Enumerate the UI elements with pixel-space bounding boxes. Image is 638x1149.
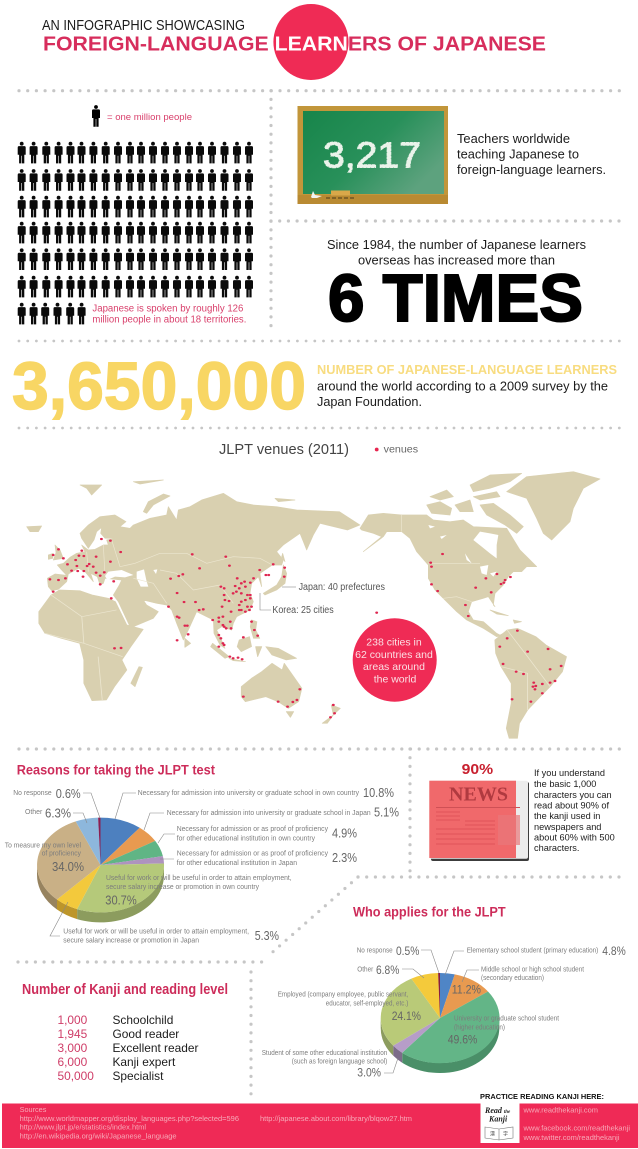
90% figure: 90% xyxy=(462,761,493,778)
kanji counts xyxy=(58,1013,94,1083)
teachers text: foreign-language learners. xyxy=(457,163,606,177)
pie labels: University or graduate school student xyxy=(454,1016,559,1023)
links: www.readthekanji.com xyxy=(522,1106,598,1115)
growth text: overseas has increased more than xyxy=(358,253,555,268)
newspaper text: If you understand xyxy=(534,768,605,778)
footer xyxy=(2,1092,638,1148)
main heading: FOREIGN-LANGUAGE LEARNERS OF JAPANESE xyxy=(43,32,546,55)
newspaper text: about 60% with 500 xyxy=(534,832,615,842)
pie labels: Employed (company employee, public servant, xyxy=(278,992,408,999)
big number: 3,650,000: 3,650,000 xyxy=(12,349,306,424)
reading levels: Excellent reader xyxy=(112,1041,198,1055)
reading levels: Good reader xyxy=(112,1027,179,1041)
pie labels xyxy=(262,944,626,1080)
pie labels: secure salary increase or promotion in own country xyxy=(106,884,259,891)
big number: 6 times: 6 TIMES xyxy=(328,261,583,336)
callout: 238 cities: 238 cities in xyxy=(366,637,422,649)
logo: Read the Kanji: Read the xyxy=(484,1106,511,1115)
pie labels: Necessary for admission or as proof of proficiency xyxy=(177,826,328,833)
panel: speakers pictogram xyxy=(18,105,253,326)
pie labels: Necessary for admission or as proof of proficiency xyxy=(177,851,328,858)
pie labels: 49.6% xyxy=(448,1032,478,1046)
sources: Sources xyxy=(20,1105,47,1114)
panel: teachers chalkboard xyxy=(298,106,606,204)
pie labels: Useful for work or will be useful in order to attain employment, xyxy=(106,875,292,882)
title badge circle xyxy=(273,4,349,80)
map legend: venues xyxy=(384,444,418,456)
chalk number: 3,217 xyxy=(323,134,421,176)
pie chart: reasons xyxy=(37,818,164,922)
logo: Read the Kanji xyxy=(480,1103,520,1143)
sources: http://www.worldmapper.org/display_languages.php?selected=596 xyxy=(20,1114,239,1123)
pie labels: 4.8% xyxy=(602,944,626,958)
callout: Japan: Japan: 40 prefectures xyxy=(299,582,385,593)
newspaper text: the basic 1,000 xyxy=(534,779,596,789)
pie labels: No response xyxy=(13,790,52,797)
links: www.twitter.com/readthekanji xyxy=(522,1133,620,1142)
panel: reasons for taking the JLPT xyxy=(5,762,399,945)
sources: http://japanese.about.com/library/blqow27.htm xyxy=(260,1114,412,1123)
newspaper text: the kanji used in xyxy=(534,811,600,821)
pie labels: Other xyxy=(357,967,374,974)
practice heading: PRACTICE READING KANJI HERE: xyxy=(480,1092,604,1101)
pie labels: (higher education) xyxy=(454,1024,505,1031)
newspaper text: newspapers and xyxy=(534,822,601,832)
reading levels xyxy=(112,1013,198,1083)
speakers caption: Japanese is spoken by roughly 126 xyxy=(92,304,244,315)
pie labels: 24.1% xyxy=(392,1009,421,1023)
callout: Korea: Korea: 25 cities xyxy=(272,605,334,616)
teachers text: teaching Japanese to xyxy=(457,148,579,162)
pie labels: Other xyxy=(25,809,43,816)
kanji counts: 50,000 xyxy=(58,1069,94,1083)
pie labels: 0.5% xyxy=(396,944,420,958)
panel: who applies for the JLPT xyxy=(262,905,626,1080)
heading: Who applies for the JLPT xyxy=(353,905,506,920)
panel: growth since 1984 xyxy=(327,237,586,336)
newspaper text xyxy=(534,768,615,853)
speakers caption xyxy=(92,304,246,326)
logo: Read the Kanji: Kanji xyxy=(488,1114,508,1124)
reading levels: Kanji expert xyxy=(112,1055,176,1069)
pie labels: Elementary school student (primary education) xyxy=(467,948,598,955)
panel: newspaper 90% xyxy=(429,761,615,861)
pie labels: 11.2% xyxy=(452,982,481,996)
panel: JLPT venues map xyxy=(27,441,600,738)
pie labels: 10.8% xyxy=(363,785,394,800)
pie labels: To measure my own level xyxy=(5,842,81,849)
reading levels: Schoolchild xyxy=(112,1013,173,1027)
pie labels: 4.9% xyxy=(332,826,357,841)
pie labels: 5.1% xyxy=(374,805,399,820)
pie labels: 5.3% xyxy=(255,928,279,943)
pie labels: 6.8% xyxy=(376,963,400,977)
title xyxy=(42,4,546,80)
teachers text: Teachers worldwide xyxy=(457,132,570,146)
pie labels: (secondary education) xyxy=(481,975,544,982)
legend: one million people: = one million people xyxy=(107,112,192,123)
learners description xyxy=(317,380,608,409)
people grid xyxy=(18,142,253,324)
footer band xyxy=(2,1104,638,1148)
kanji counts: 1,000 xyxy=(58,1013,88,1027)
learners heading: NUMBER OF JAPANESE-LANGUAGE LEARNERS xyxy=(317,363,617,377)
kanji counts: 6,000 xyxy=(58,1055,88,1069)
pie labels: educator, self-employed, etc.) xyxy=(326,1001,408,1008)
pie labels: Necessary for admission into university or graduate school in own country xyxy=(138,790,359,797)
kanji counts: 1,945 xyxy=(58,1027,88,1041)
logo: Read the Kanji: 字 xyxy=(503,1132,508,1138)
heading: Reasons for taking the JLPT test xyxy=(17,762,215,777)
pie labels: 3.0% xyxy=(357,1066,381,1080)
pie labels: of proficiency xyxy=(42,851,81,858)
newspaper text: read about 90% of xyxy=(534,800,610,810)
venue dots xyxy=(50,539,561,717)
sources: http://en.wikipedia.org/wiki/Japanese_language xyxy=(20,1132,177,1140)
kanji counts: 3,000 xyxy=(58,1041,88,1055)
callout: Korea xyxy=(260,593,334,616)
sources xyxy=(20,1105,412,1140)
pie chart: applicants xyxy=(381,973,500,1073)
pie labels: Useful for work or will be useful in order to attain employment, xyxy=(63,928,249,935)
pie labels: No response xyxy=(357,948,393,955)
learners description: around the world according to a 2009 survey by the xyxy=(317,380,608,394)
pie labels: 2.3% xyxy=(332,850,357,865)
links: www.facebook.com/readthekanji xyxy=(522,1124,630,1133)
newspaper text: characters you can xyxy=(534,790,612,800)
world map xyxy=(27,472,600,738)
title kicker: AN INFOGRAPHIC SHOWCASING xyxy=(42,18,245,34)
leader lines xyxy=(50,793,175,936)
newspaper text: characters. xyxy=(534,843,579,853)
pie labels: Student of some other educational institution xyxy=(262,1050,387,1057)
callout: 238 cities: 62 countries and xyxy=(355,649,433,661)
leader lines xyxy=(384,950,479,1073)
learners description: Japan Foundation. xyxy=(317,395,422,409)
teachers text xyxy=(457,132,606,177)
growth text: Since 1984, the number of Japanese learners xyxy=(327,237,586,252)
legend: one million people xyxy=(92,105,192,127)
pie labels: secure salary increase or promotion in Japan xyxy=(63,938,199,945)
heading: Number of Kanji and reading level xyxy=(22,982,228,998)
callout: 238 cities: the world xyxy=(374,674,416,686)
pie labels: 6.3% xyxy=(45,806,71,821)
callout: 238 cities: areas around xyxy=(363,661,425,673)
links xyxy=(522,1106,630,1142)
logo: Read the Kanji: 漢 xyxy=(490,1130,495,1138)
growth text xyxy=(327,237,586,268)
pie labels: 30.7% xyxy=(105,892,137,907)
pie labels: for other educational institution in own country xyxy=(177,835,315,842)
pie labels: Necessary for admission into university or graduate school in Japan xyxy=(167,810,371,817)
icon: chalkboard xyxy=(298,106,448,204)
icon: newspaper: NEWS xyxy=(449,784,508,806)
speakers caption: million people in about 18 territories. xyxy=(92,315,246,326)
sources: http://www.jlpt.jp/e/statistics/index.html xyxy=(20,1122,146,1132)
callout: 238 cities xyxy=(353,618,437,702)
pie labels xyxy=(5,785,399,945)
pie labels: 34.0% xyxy=(52,859,84,874)
reading levels: Specialist xyxy=(112,1069,164,1083)
panel: kanji reading levels xyxy=(22,982,228,1083)
pie labels: 0.6% xyxy=(56,786,81,801)
map title: JLPT venues (2011) xyxy=(219,441,349,458)
icon: newspaper xyxy=(429,781,529,861)
pie labels: Middle school or high school student xyxy=(481,967,584,974)
pie labels: for other educational institution in Japan xyxy=(177,860,297,867)
panel: total learners xyxy=(12,349,617,424)
pie labels: (such as foreign language school) xyxy=(292,1058,387,1065)
